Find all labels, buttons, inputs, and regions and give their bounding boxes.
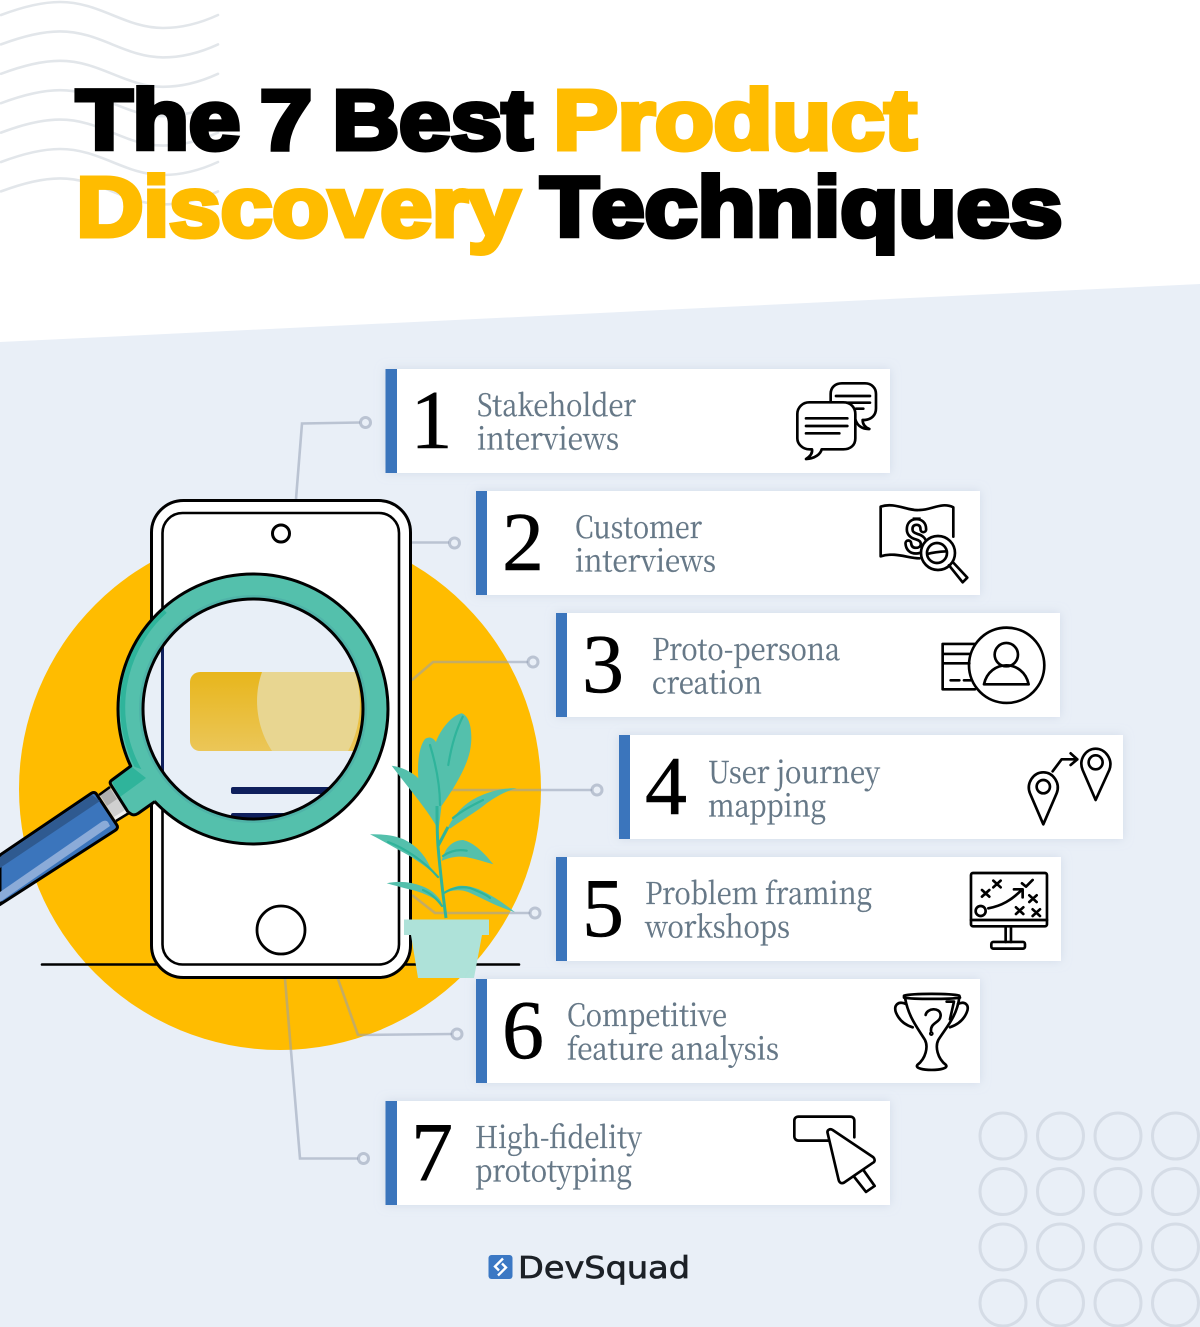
background panel: [0, 284, 1200, 1327]
wave pattern: [1, 2, 218, 204]
number 5: 5: [582, 862, 624, 955]
label 6: feature analysis: [567, 1024, 779, 1068]
dot grid decoration: [980, 1113, 1198, 1326]
label 5: workshops: [644, 902, 790, 946]
logo mark: [488, 1255, 512, 1279]
ground line: [42, 963, 519, 966]
label 5: [644, 869, 872, 946]
label 1: interviews: [477, 414, 619, 458]
label 2: interviews: [575, 536, 716, 580]
icon: trophy: [895, 994, 968, 1070]
number 2: 2: [502, 496, 544, 589]
number 6: 6: [502, 984, 544, 1077]
title: 7: [260, 73, 312, 167]
title: [76, 73, 1062, 254]
neck: [110, 766, 158, 815]
number 4: 4: [645, 740, 687, 833]
label 4: User journey: [708, 748, 880, 792]
connector lines: [285, 418, 602, 1164]
label 7: High-fidelity: [475, 1113, 642, 1157]
label 3: creation: [652, 658, 762, 702]
logo: DevSquad: DevSquad: [518, 1251, 690, 1286]
title: Discovery: [76, 160, 520, 254]
label 5: Problem framing: [645, 869, 872, 913]
panel: item 6: [476, 979, 980, 1083]
icon: strategy board: [971, 873, 1047, 949]
label 1: Stakeholder: [477, 381, 636, 425]
icon: cursor button: [794, 1117, 875, 1192]
title: Product: [554, 73, 916, 167]
icon: map pins: [1029, 749, 1110, 824]
panel: item 7: [386, 1101, 890, 1205]
label 2: [575, 503, 716, 580]
label 2: Customer: [575, 503, 702, 547]
panel: item 4: [619, 735, 1123, 839]
number 1: 1: [410, 374, 452, 467]
icon: persona: [943, 628, 1044, 703]
title: Best: [332, 73, 532, 167]
label 4: mapping: [708, 782, 826, 826]
illustration: magnifying glass: [0, 574, 388, 904]
panel: item 5: [556, 857, 1061, 961]
title: The: [76, 73, 240, 167]
icon: speech bubbles: [797, 383, 876, 459]
panel: item 3: [556, 613, 1060, 717]
illustration: phone: [152, 500, 410, 978]
label 4: [708, 748, 880, 826]
number 7: 7: [411, 1106, 453, 1199]
yellow circle: [19, 528, 541, 1050]
label 7: [475, 1113, 642, 1190]
lens ring: [118, 574, 388, 844]
panel: item 1: [386, 369, 890, 473]
panel: item 2: [476, 491, 980, 595]
illustration: plant: [370, 713, 517, 978]
lens: [144, 600, 362, 818]
number 3: 3: [582, 618, 624, 711]
icon: dollar search: [881, 505, 967, 582]
label 7: prototyping: [475, 1146, 632, 1190]
label 3: [652, 625, 840, 702]
label 6: [567, 991, 779, 1068]
label 3: Proto-persona: [652, 625, 840, 669]
title: Techniques: [540, 160, 1062, 254]
handle: [0, 787, 129, 904]
label 1: [477, 381, 636, 458]
label 6: Competitive: [567, 991, 727, 1035]
